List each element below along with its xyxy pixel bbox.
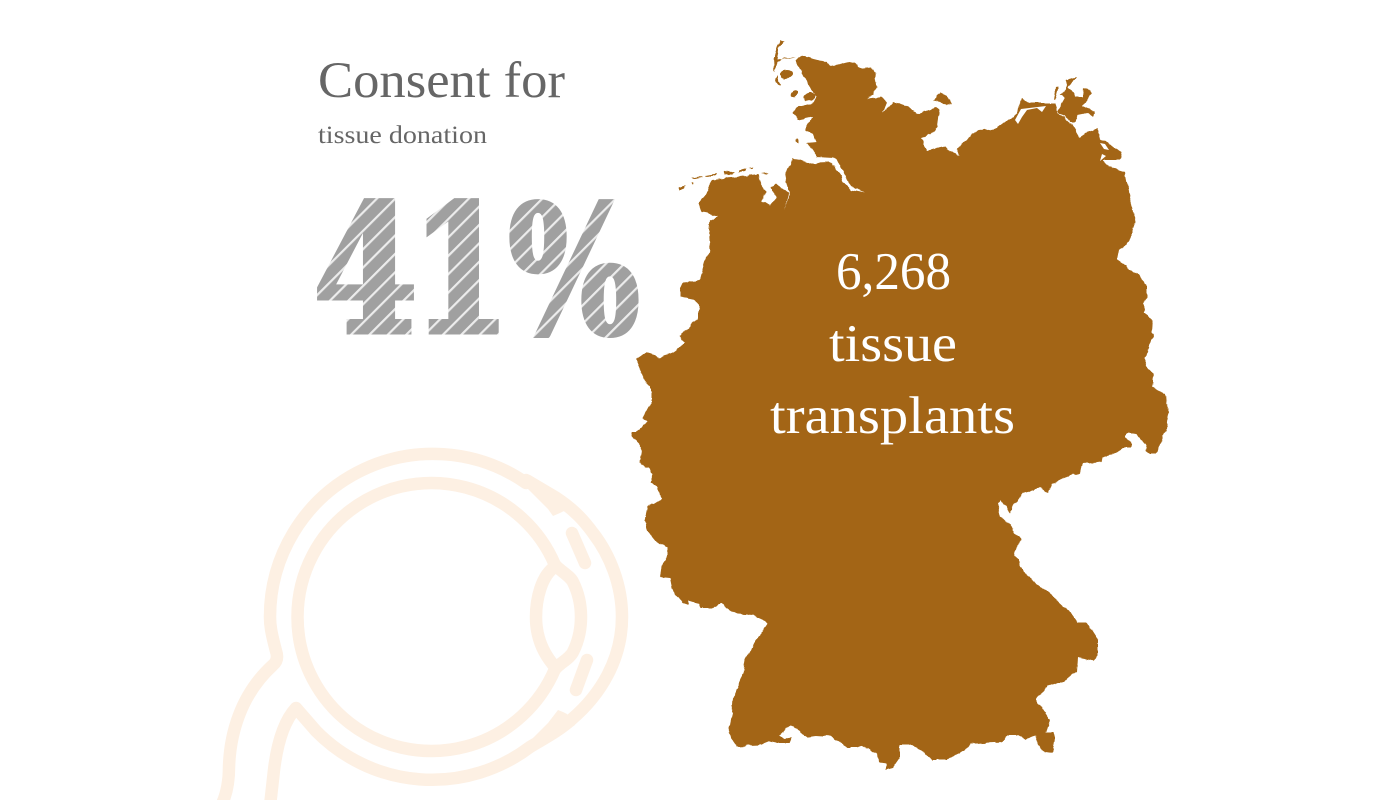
Fehmarn (934, 93, 952, 105)
Foehr (780, 70, 794, 78)
Nordstrand (803, 92, 817, 102)
map label (770, 243, 1015, 445)
digit 4: 4 (313, 166, 418, 374)
mainland (631, 56, 1169, 770)
eye: sclera with optic nerve (221, 454, 526, 800)
percent sign: % (508, 167, 640, 375)
transplant count: 6,268 (836, 243, 951, 301)
icon: eye cross-section (221, 454, 622, 800)
Amrum (775, 75, 781, 85)
Ruegen (1058, 77, 1095, 123)
eye: lower iris bar (576, 660, 587, 690)
eye: upper wedge (522, 475, 566, 516)
lagoon cut-outs (1015, 106, 1109, 161)
subtitle: tissue donation (318, 122, 488, 149)
digit 1: 1 (411, 166, 511, 374)
eye: lens right curve (556, 566, 581, 668)
map: Germany (631, 40, 1169, 770)
East Frisian islands (678, 167, 769, 190)
label line 1: tissue (829, 315, 957, 373)
eye: retina ring (298, 483, 555, 751)
small Hallig (796, 139, 798, 143)
Pellworm (790, 89, 800, 99)
label line 2: transplants (770, 387, 1015, 445)
eye: lower wedge (528, 710, 575, 755)
big percentage (313, 166, 640, 375)
eye: upper iris bar (572, 533, 585, 563)
Hiddensee (1054, 86, 1059, 100)
Sylt (773, 40, 795, 72)
eye: lens left curve (536, 566, 556, 668)
title: Consent for (318, 53, 565, 109)
eye: cornea and lower sclera (270, 480, 622, 800)
